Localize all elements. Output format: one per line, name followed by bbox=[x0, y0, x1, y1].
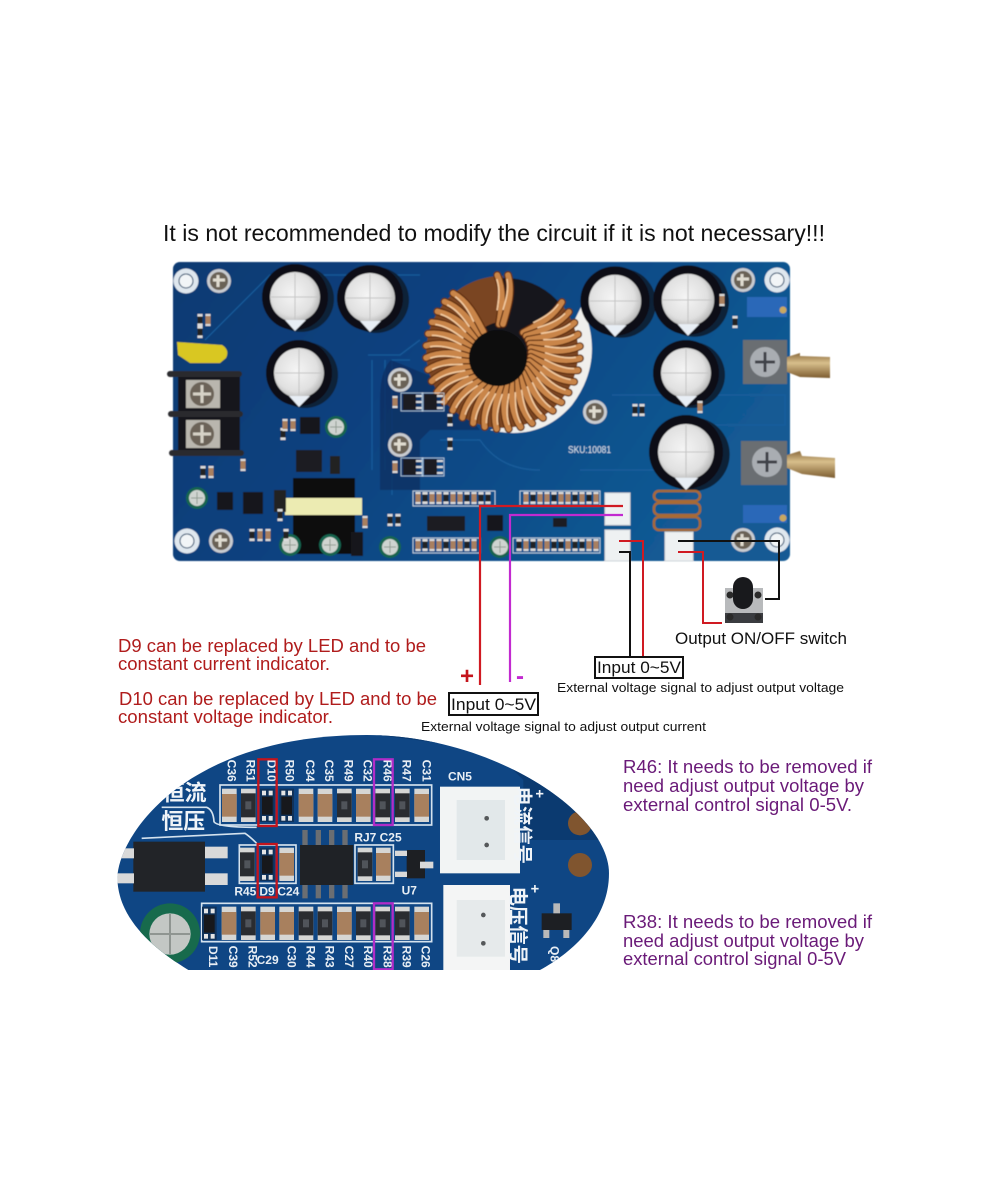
component labels: top row: R46 bbox=[380, 760, 394, 782]
Chinese silk-screen labels: 恒流 bbox=[163, 781, 207, 806]
panel: circuit board photo bbox=[167, 262, 835, 561]
semiconductor chips bbox=[217, 393, 567, 556]
potentiometers bbox=[743, 297, 787, 523]
Chinese silk-screen labels: + bbox=[531, 881, 539, 897]
electrolytic capacitor bbox=[140, 903, 200, 963]
component labels: middle: D9 bbox=[259, 885, 275, 899]
component labels: bottom row: R40 bbox=[361, 946, 375, 968]
component labels: bottom row: R38 bbox=[380, 946, 394, 968]
component labels: middle: CN5 bbox=[448, 770, 472, 784]
highlight: R38 bbox=[374, 903, 393, 969]
transistor Q8 bbox=[542, 903, 572, 938]
Chinese silk-screen labels: 恒压 bbox=[161, 809, 205, 834]
middle row components bbox=[240, 848, 391, 881]
note: R38: R38: It needs to be removed if bbox=[623, 912, 873, 932]
component labels: bottom row: R52 bbox=[245, 946, 259, 968]
component labels: top row: C31 bbox=[420, 760, 434, 782]
mounting holes bbox=[174, 268, 790, 554]
note: D10 bbox=[118, 689, 437, 727]
transformer bbox=[285, 478, 362, 554]
Chinese silk-screen labels: 电流信号 bbox=[511, 787, 533, 864]
input box: current: Input 0~5V bbox=[451, 695, 537, 714]
toroid inductor bbox=[426, 275, 592, 433]
component labels: bottom row: R43 bbox=[323, 946, 337, 968]
component labels: bottom row: R39 bbox=[399, 946, 413, 968]
highlight: D9 bbox=[258, 844, 277, 897]
component labels: top row: C32 bbox=[360, 760, 374, 782]
polarity plus: + bbox=[460, 663, 474, 690]
component labels: bottom row: R44 bbox=[304, 946, 318, 968]
component labels: bottom row: C39 bbox=[226, 946, 240, 968]
small copper inductor bbox=[654, 491, 700, 530]
switch label: Output ON/OFF switch bbox=[675, 629, 847, 648]
component labels: middle bbox=[234, 770, 562, 962]
component labels: top row: R49 bbox=[341, 760, 355, 782]
polarity minus: - bbox=[516, 663, 524, 690]
note: D9: constant current indicator. bbox=[118, 654, 330, 674]
small electrolytic capacitors bbox=[186, 416, 511, 558]
note: R38 bbox=[623, 912, 873, 969]
note: R46: R46: It needs to be removed if bbox=[623, 757, 873, 777]
note: R46: external control signal 0-5V. bbox=[623, 795, 852, 815]
component labels: middle: Q8 bbox=[548, 946, 562, 962]
component labels: bottom row: C30 bbox=[285, 946, 299, 968]
output lug terminals bbox=[741, 340, 835, 485]
board label SKU: SKU:10081 bbox=[568, 445, 611, 456]
component labels: top row: R50 bbox=[283, 760, 297, 782]
panel: magnified board detail bbox=[117, 735, 609, 970]
board base bbox=[173, 262, 790, 561]
Chinese silk-screen labels: 电压信号 bbox=[506, 887, 528, 964]
wires: switch bbox=[678, 541, 779, 623]
fuse bbox=[177, 342, 227, 363]
component labels: top row: R51 bbox=[244, 760, 258, 782]
component labels: middle: RJ7 C25 bbox=[354, 830, 402, 844]
connector CN6 bbox=[443, 885, 510, 970]
component labels: bottom row: C27 bbox=[342, 946, 356, 968]
component labels: bottom row: C29 bbox=[257, 953, 279, 967]
optocoupler bbox=[117, 842, 228, 892]
note: R46 bbox=[623, 757, 873, 815]
component labels: middle: R45 bbox=[234, 885, 257, 899]
component labels: bottom row: C26 bbox=[419, 946, 433, 968]
connectors bbox=[605, 493, 693, 561]
component labels: top row: C34 bbox=[303, 760, 317, 782]
highlight: R46 bbox=[374, 759, 393, 825]
component labels: bottom row: D11 bbox=[206, 946, 220, 968]
wires: voltage input bbox=[619, 541, 643, 657]
capacitors bbox=[262, 264, 730, 491]
note: D10: D10 can be replaced by LED and to be bbox=[119, 689, 437, 709]
title: It is not recommended to modify the circuit if it is not necessary!!! bbox=[163, 220, 825, 246]
note: R38: need adjust output voltage by bbox=[623, 931, 864, 951]
Chinese silk-screen labels bbox=[161, 781, 544, 964]
note: D9: D9 can be replaced by LED and to be bbox=[118, 636, 426, 656]
note: R38: external control signal 0-5V bbox=[623, 949, 846, 969]
connector CN5 bbox=[440, 787, 520, 873]
component labels: middle: U7 bbox=[402, 884, 417, 898]
input box: voltage: Input 0~5V bbox=[597, 658, 682, 677]
copper pads bbox=[568, 811, 592, 877]
caption: voltage signal: External voltage signal to adjust output voltage bbox=[557, 680, 844, 695]
input terminal block bbox=[167, 371, 244, 456]
component labels: middle: C24 bbox=[277, 885, 300, 899]
note: D10: constant voltage indicator. bbox=[118, 707, 333, 727]
component labels: top row: C35 bbox=[322, 760, 336, 782]
component labels: bottom row bbox=[206, 946, 433, 968]
top row components bbox=[222, 789, 429, 822]
bottom row components bbox=[202, 907, 429, 940]
wires: current input bbox=[480, 506, 623, 685]
note: R46: need adjust output voltage by bbox=[623, 776, 864, 796]
component labels: top row: C36 bbox=[224, 760, 238, 782]
component labels: top row bbox=[224, 760, 434, 782]
highlight: D10 bbox=[258, 759, 277, 826]
resistor and capacitor strips bbox=[198, 294, 738, 553]
component labels: top row: D10 bbox=[264, 760, 278, 782]
transistor U7 bbox=[395, 850, 433, 878]
caption: current signal: External voltage signal to adjust output current bbox=[421, 719, 706, 734]
component labels: top row: R47 bbox=[399, 760, 413, 782]
IC U8 bbox=[300, 830, 353, 898]
Chinese silk-screen labels: + bbox=[535, 786, 544, 802]
note: D9 bbox=[118, 636, 426, 674]
icon: tactile switch bbox=[725, 577, 763, 623]
